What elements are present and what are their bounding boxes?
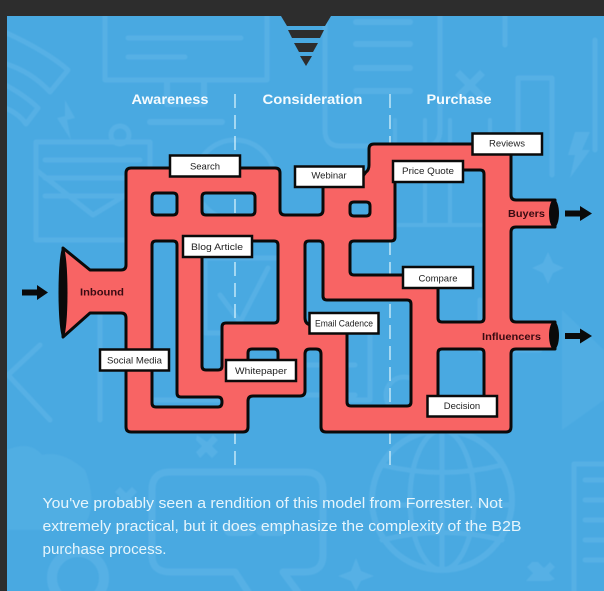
node labels: Decision <box>444 401 480 412</box>
stage headings: Consideration <box>262 92 362 107</box>
funnel icon <box>281 16 331 66</box>
node labels: Social Media <box>107 356 163 366</box>
maze pipe <box>63 144 555 432</box>
caption text <box>42 496 522 558</box>
arrow: out of buyers <box>565 206 592 221</box>
pipe labels: Buyers <box>508 208 545 220</box>
node labels: Price Quote <box>402 166 454 177</box>
node labels <box>107 138 525 412</box>
node labels: Compare <box>418 274 458 284</box>
node labels: Webinar <box>311 170 347 182</box>
pipe labels: Inbound <box>80 286 124 298</box>
arrow: out of influencers <box>565 328 592 344</box>
node labels: Search <box>190 162 220 172</box>
stage headings: Awareness <box>132 92 208 107</box>
caption text: extremely practical, but it does emphasize the complexity of the B2B <box>42 519 522 535</box>
arrow: into inbound <box>22 285 48 300</box>
buyers pipe cap <box>549 200 559 228</box>
pipe labels <box>80 208 545 343</box>
node labels: Reviews <box>489 138 525 150</box>
inbound funnel mouth <box>58 248 68 338</box>
stage headings: Purchase <box>426 92 492 107</box>
stage headings <box>132 92 492 107</box>
influencers pipe cap <box>549 322 559 350</box>
node labels: Email Cadence <box>315 318 373 328</box>
node labels: Blog Article <box>191 242 243 253</box>
pipe labels: Influencers <box>482 331 541 343</box>
divider: dashed stage lines <box>235 94 390 465</box>
caption text: purchase process. <box>42 542 166 558</box>
node labels: Whitepaper <box>235 366 287 377</box>
node boxes <box>100 134 542 416</box>
caption text: You've probably seen a rendition of this model from Forrester. Not <box>42 496 502 512</box>
